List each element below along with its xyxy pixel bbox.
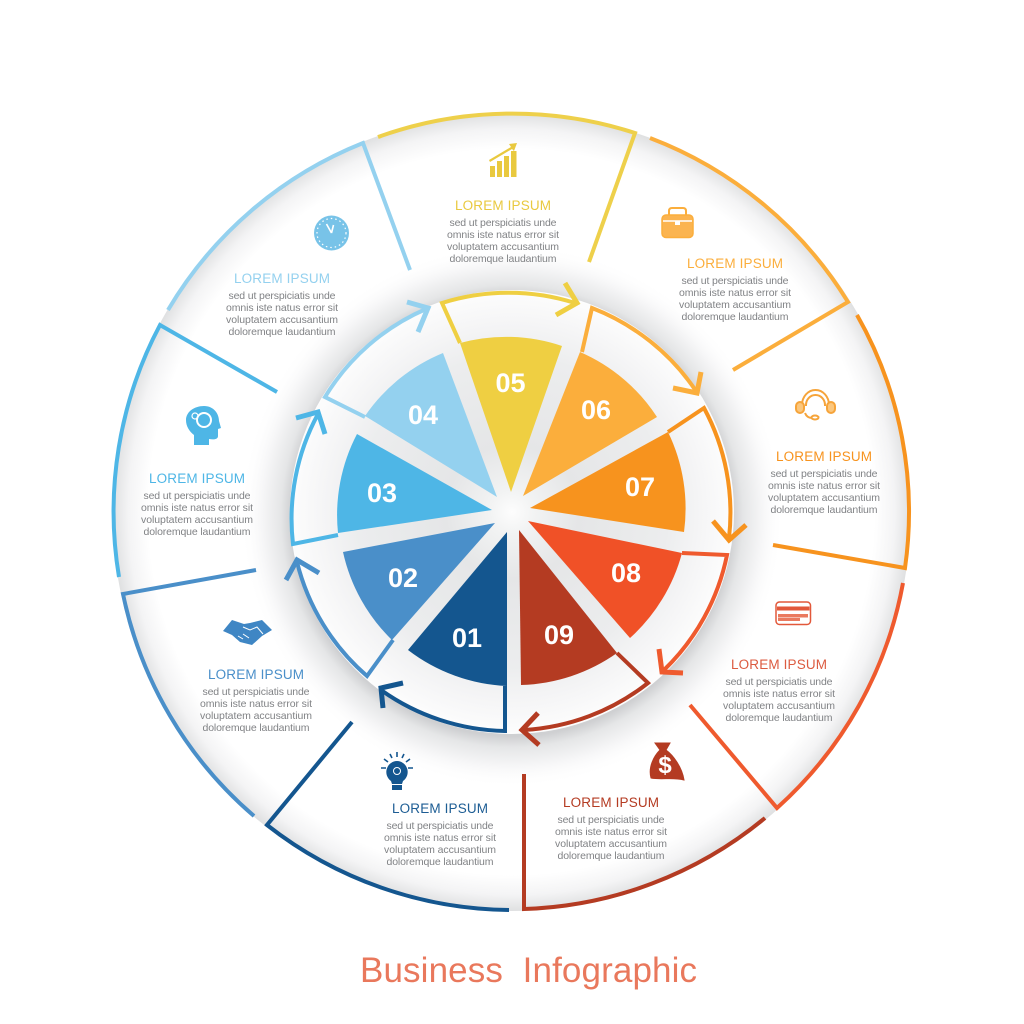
description 5: sed ut perspiciatis unde [450,217,557,229]
description 6: doloremque laudantium [682,311,789,323]
description 1 [384,820,496,868]
description 9: omnis iste natus error sit [555,826,667,838]
description 8: doloremque laudantium [726,712,833,724]
description 2 [200,686,312,734]
description 7: omnis iste natus error sit [768,480,880,492]
description 6: voluptatem accusantium [679,299,791,311]
pie sector 03 [337,434,492,533]
arrow 6 [582,308,701,393]
title: Business Infographic [360,951,697,990]
description 6 [679,275,791,323]
panel: segment 5 [378,114,635,265]
description 3: omnis iste natus error sit [141,502,253,514]
pie sector 06 [523,352,657,496]
description 2: doloremque laudantium [202,722,310,734]
icon: money bag [650,743,684,780]
outer border 9 [524,774,765,909]
description 4: omnis iste natus error sit [226,302,338,314]
title 3: LOREM IPSUM [149,471,245,486]
description 2: sed ut perspiciatis unde [202,686,310,698]
icon: clock [314,216,349,250]
pie sector 07 [530,432,686,532]
panel: segment 7 [768,315,909,568]
pie sector 09 [519,530,617,685]
description 6: sed ut perspiciatis unde [682,275,789,287]
description 9: sed ut perspiciatis unde [558,814,665,826]
description 1: doloremque laudantium [386,856,494,868]
outer border 4 [168,143,410,310]
description 3 [141,490,253,538]
icon: money bag: $ [658,752,672,779]
panel: segment 8 [690,583,903,808]
arrow 5 [442,283,577,343]
pie sector 05: 05 [495,368,526,398]
outer border 1 [267,722,509,910]
description 5 [447,217,559,265]
description 8 [723,676,835,724]
description 7: sed ut perspiciatis unde [770,468,878,480]
title 9: LOREM IPSUM [563,795,659,810]
description 9: voluptatem accusantium [555,838,667,850]
description 7: voluptatem accusantium [768,492,880,504]
panel: segment 9 [524,743,765,909]
panel: segment 2 [123,570,312,816]
pie sector 03: 03 [367,478,397,508]
pie sector 06: 06 [581,395,611,425]
pie sector 01: 01 [452,623,482,653]
description 1: sed ut perspiciatis unde [386,820,494,832]
description 1: voluptatem accusantium [384,844,496,856]
icon: headset [796,390,835,420]
description 4: doloremque laudantium [228,326,336,338]
description 8: sed ut perspiciatis unde [726,676,833,688]
description 3: doloremque laudantium [144,526,251,538]
description 3: voluptatem accusantium [141,514,253,526]
description 8: voluptatem accusantium [723,700,835,712]
description 5: omnis iste natus error sit [447,229,559,241]
outer border 6 [650,138,848,370]
outer border 7 [773,315,909,568]
panel: segment 6 [650,138,848,370]
description 5: doloremque laudantium [450,253,557,265]
title 2: LOREM IPSUM [208,667,304,682]
icon: head with gears [186,406,221,445]
title 6: LOREM IPSUM [687,256,783,271]
outer border 5 [378,114,635,262]
pie sector 01 [408,532,507,686]
pie sector 08 [528,521,682,638]
panel: segment 1 [267,722,509,910]
description 8: omnis iste natus error sit [723,688,835,700]
description 9: doloremque laudantium [558,850,665,862]
pie sector 04: 04 [408,400,438,430]
title 4: LOREM IPSUM [234,271,330,286]
icon: credit card [776,602,810,624]
description 2: voluptatem accusantium [200,710,312,722]
arrow 9 [522,653,648,745]
title 8: LOREM IPSUM [731,657,827,672]
pie sector 05 [460,337,562,492]
pie sector 04 [365,353,497,497]
icon: briefcase [662,208,693,238]
arrow 3 [292,412,338,544]
inner disc [290,290,734,734]
title 7: LOREM IPSUM [776,449,872,464]
pie sector 08: 08 [611,558,641,588]
description 4: sed ut perspiciatis unde [228,290,336,302]
arrow 2 [286,560,393,676]
outer border 2 [123,570,256,816]
pie sector 02 [343,523,495,640]
description 6: omnis iste natus error sit [679,287,791,299]
title 1: LOREM IPSUM [392,801,488,816]
title 5: LOREM IPSUM [455,198,551,213]
description 1: omnis iste natus error sit [384,832,496,844]
panel: segment 4 [168,143,410,338]
outer disc background [112,113,910,911]
description 4 [226,290,338,338]
description 5: voluptatem accusantium [447,241,559,253]
description 7 [768,468,880,516]
pie sector 07: 07 [625,472,655,502]
panel: segment 3 [114,325,277,577]
icon: handshake [223,620,272,645]
description 7: doloremque laudantium [770,504,878,516]
outer border 3 [114,325,277,577]
pie sector 02: 02 [388,563,418,593]
arrow 8 [659,553,727,673]
icon: light bulb [381,752,413,790]
description 4: voluptatem accusantium [226,314,338,326]
arrow 4 [325,302,428,417]
arrow 7 [668,408,746,540]
inner disc drop shadow [240,244,784,788]
icon: bar chart [489,143,517,177]
arrow 1 [381,683,505,731]
outer border 8 [690,583,903,808]
description 3: sed ut perspiciatis unde [144,490,251,502]
pie sector 09: 09 [544,620,574,650]
description 9 [555,814,667,862]
description 2: omnis iste natus error sit [200,698,312,710]
